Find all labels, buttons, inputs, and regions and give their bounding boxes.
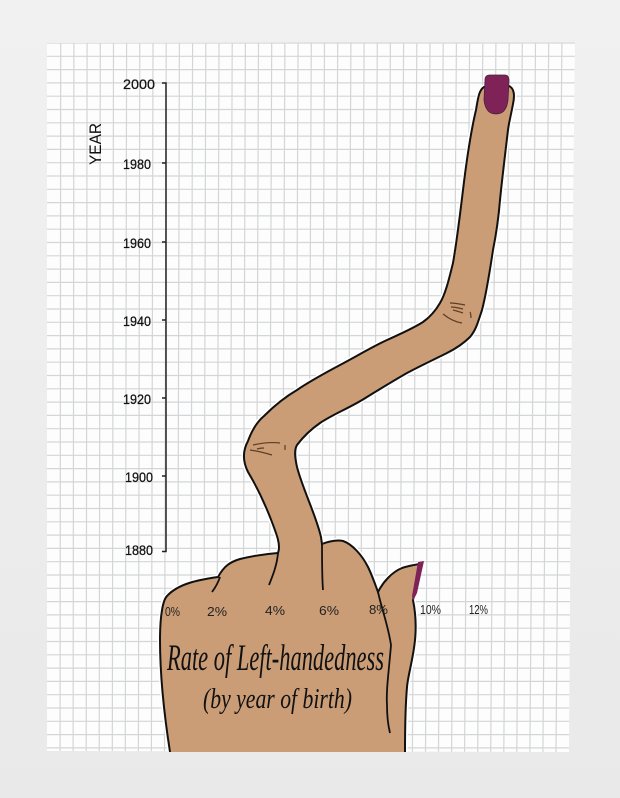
axis labels: percentages: 6% [319,603,339,618]
hand outline halo [160,86,514,752]
axis labels: percentages: 12% [469,602,488,617]
hand and finger shape [160,86,514,752]
axis labels: percentages: 4% [265,603,285,618]
axis labels: percentages: 0% [165,604,180,619]
finger and thumb creases [212,544,391,733]
icon: fingernail [484,75,509,114]
infographic canvas [47,42,575,752]
axis labels: years: 1900 [125,469,153,485]
axis labels: percentages: 10% [420,602,441,617]
axis labels: percentages: 8% [369,602,388,617]
axis labels: years: 1940 [123,313,151,329]
icon: thumbnail [412,561,424,601]
knuckle wrinkles [250,303,471,455]
axis labels: years: 1880 [125,542,153,558]
axis labels: years: 1960 [123,235,151,251]
axis labels: years [123,76,155,558]
axis labels: percentages [165,602,488,619]
illustration: hand with bent middle finger as the trend line [160,75,514,752]
axis title: year: YEAR [86,123,105,165]
axis labels: years: 1920 [123,391,151,407]
axis labels: percentages: 2% [207,604,227,619]
axis labels: years: 1980 [123,156,151,172]
chart subtitle: (by year of birth) [203,684,352,715]
year axis [123,76,166,558]
panel: graph paper sheet [47,42,576,752]
chart title: Rate of Left-handedness [166,638,384,679]
axis labels: years: 2000 [123,76,155,92]
